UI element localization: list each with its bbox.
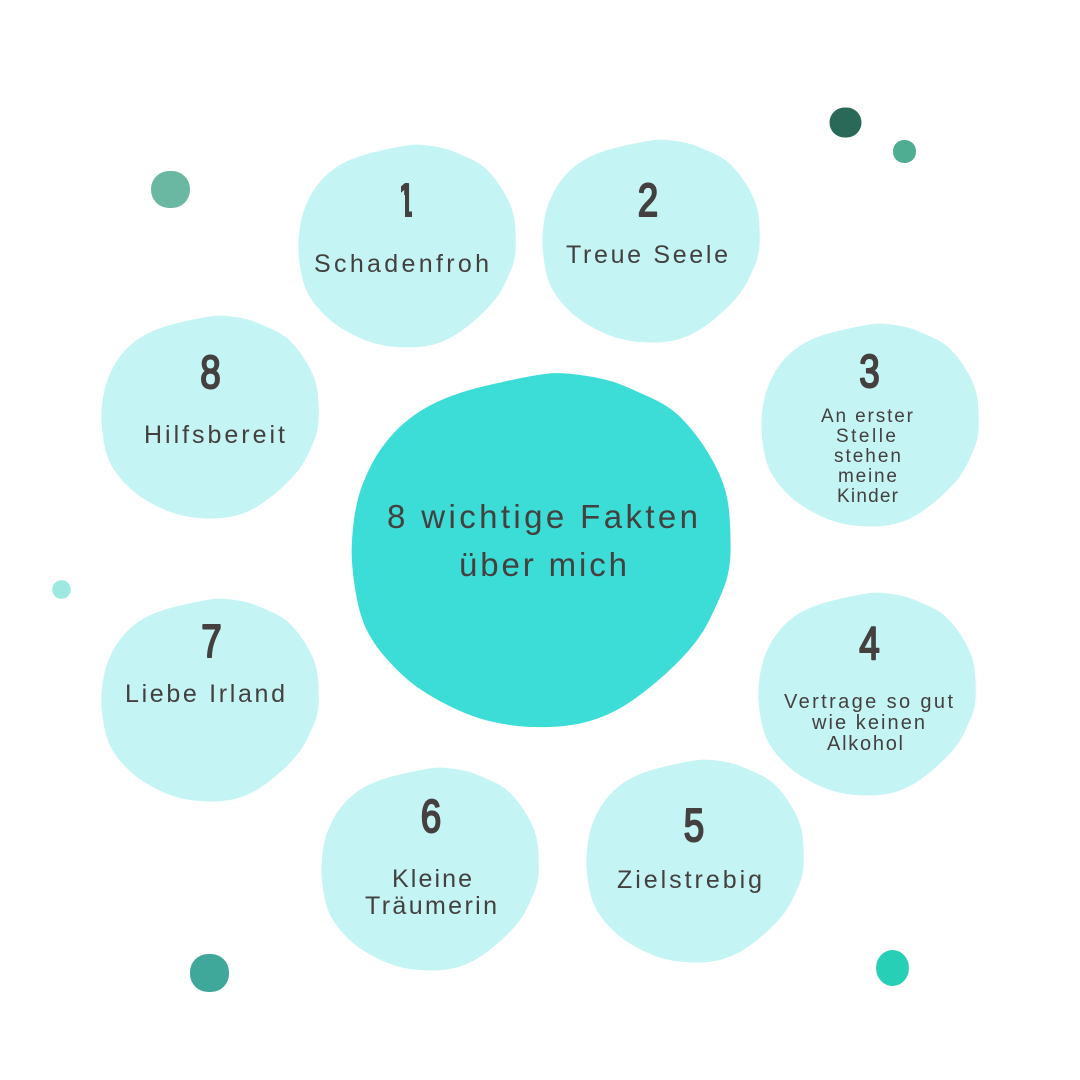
decorative dot: green top right bbox=[893, 140, 916, 163]
fact 8: Hilfsbereit: Hilfsbereit bbox=[144, 421, 285, 449]
fact 3: An erster Stelle stehen meine Kinder: 3 bbox=[859, 345, 880, 397]
fact 4: Vertrage so gut wie keinen Alkohol: Alkohol bbox=[827, 733, 903, 755]
fact 3: An erster Stelle stehen meine Kinder: stehen bbox=[834, 446, 901, 467]
fact 4: Vertrage so gut wie keinen Alkohol: wie keinen bbox=[811, 712, 925, 734]
fact 7: Liebe Irland bbox=[101, 599, 319, 802]
fact 3: An erster Stelle stehen meine Kinder: An erster bbox=[821, 406, 914, 427]
fact 8: Hilfsbereit: 8 bbox=[200, 346, 221, 398]
fact 1: Schadenfroh: 1 bbox=[396, 174, 416, 226]
fact 6: Kleine Träumerin: Kleine bbox=[392, 865, 472, 893]
fact 2: Treue Seele: Treue Seele bbox=[566, 241, 728, 269]
decorative dot: teal bottom left bbox=[190, 954, 229, 992]
fact 6: Kleine Träumerin: 6 bbox=[421, 790, 441, 842]
fact 5: Zielstrebig: 5 bbox=[684, 799, 704, 851]
fact 8: Hilfsbereit bbox=[101, 316, 319, 519]
fact 5: Zielstrebig: Zielstrebig bbox=[617, 866, 762, 894]
infographic canvas bbox=[52, 108, 979, 992]
central blob: title bbox=[352, 373, 731, 727]
fact 2: Treue Seele: 2 bbox=[638, 174, 658, 226]
fact 1: Schadenfroh: Schadenfroh bbox=[314, 250, 489, 278]
fact 2: Treue Seele bbox=[542, 140, 760, 343]
fact 3: An erster Stelle stehen meine Kinder: Kinder bbox=[837, 486, 899, 507]
fact 3: An erster Stelle stehen meine Kinder: meine bbox=[838, 466, 897, 487]
decorative dot: sage top left bbox=[151, 171, 190, 208]
fact 1: Schadenfroh bbox=[298, 145, 516, 348]
fact 6: Kleine Träumerin bbox=[321, 768, 539, 971]
decorative dot: pale aqua left bbox=[52, 580, 71, 599]
central blob: title: 8 wichtige Fakten bbox=[387, 498, 698, 535]
fact 7: Liebe Irland: 7 bbox=[201, 615, 222, 667]
decorative dot: bright teal bottom right bbox=[876, 950, 909, 986]
fact 4: Vertrage so gut wie keinen Alkohol: 4 bbox=[859, 617, 880, 669]
decorative dot: dark green top right bbox=[830, 108, 862, 138]
fact 7: Liebe Irland: Liebe Irland bbox=[125, 680, 285, 708]
fact 3: An erster Stelle stehen meine Kinder: Stelle bbox=[836, 426, 896, 447]
fact 4: Vertrage so gut wie keinen Alkohol: Vertrage so gut bbox=[784, 691, 953, 713]
fact 5: Zielstrebig bbox=[586, 760, 804, 963]
central blob: title: über mich bbox=[459, 546, 627, 583]
fact 4: Vertrage so gut wie keinen Alkohol bbox=[758, 593, 976, 796]
fact 6: Kleine Träumerin: Träumerin bbox=[365, 892, 497, 920]
fact 3: An erster Stelle stehen meine Kinder bbox=[761, 324, 979, 527]
